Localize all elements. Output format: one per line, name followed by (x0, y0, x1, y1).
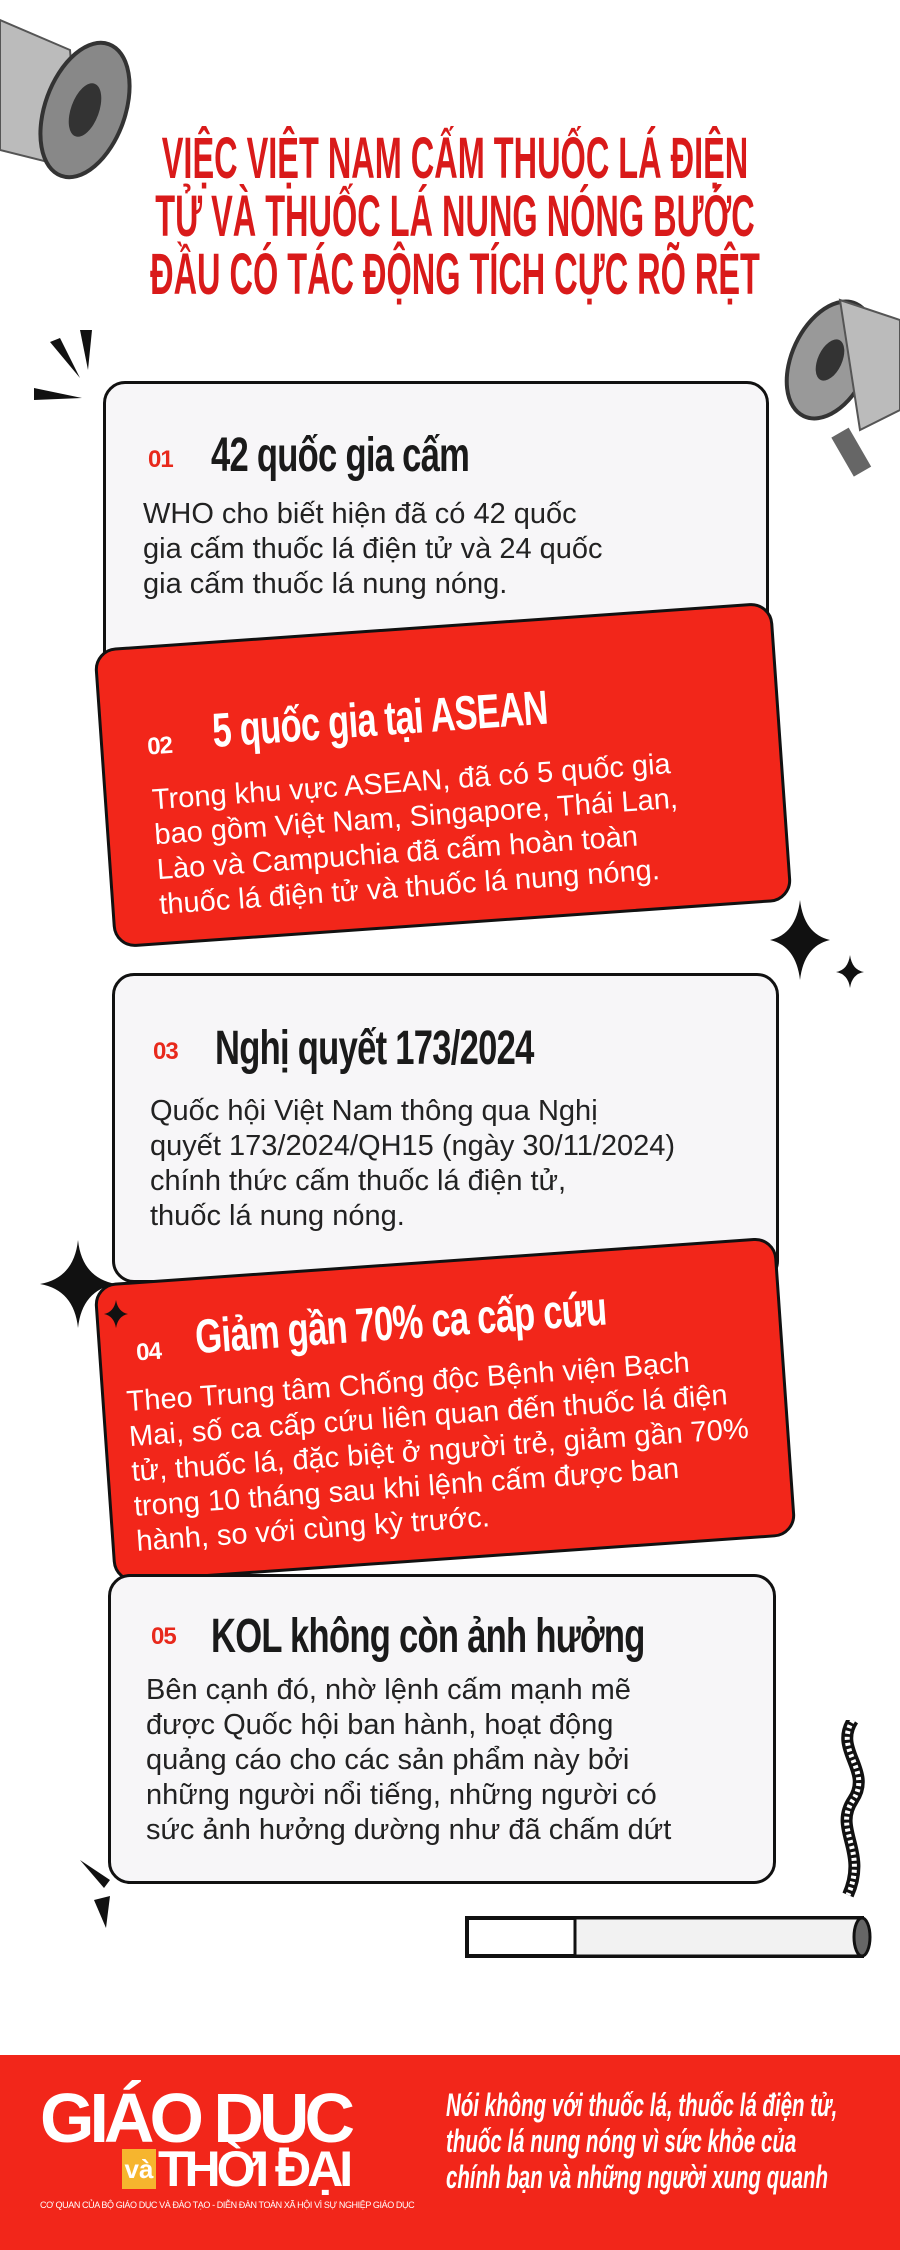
icon: megaphone top-left (0, 19, 132, 180)
icon: megaphone right (784, 298, 900, 477)
text 02: thuốc lá điện tử và thuốc lá nung nóng. (158, 854, 661, 921)
number 03: 03 (153, 1038, 178, 1065)
footer (0, 2055, 900, 2250)
heading 02: 5 quốc gia tại ASEAN (211, 682, 549, 758)
number 02: 02 (146, 732, 173, 761)
text 03: quyết 173/2024/QH15 (ngày 30/11/2024) (150, 1130, 675, 1162)
text 05 (146, 1674, 672, 1846)
text 04: hành, so với cùng kỳ trước. (135, 1501, 491, 1558)
text 05: những người nổi tiếng, những người có (146, 1779, 657, 1811)
icon: sparkle stars left (40, 1240, 128, 1328)
text 04: Mai, số ca cấp cứu liên quan đến thuốc lá điện (128, 1379, 729, 1453)
panel: card 03 (112, 973, 779, 1283)
text 03: thuốc lá nung nóng. (150, 1200, 405, 1232)
text 04: trong 10 tháng sau khi lệnh cấm được ban (133, 1453, 680, 1523)
text 01: WHO cho biết hiện đã có 42 quốc (143, 498, 577, 530)
text 02: bao gồm Việt Nam, Singapore, Thái Lan, (153, 783, 679, 851)
panel: card 02 (93, 602, 793, 948)
text 02: Trong khu vực ASEAN, đã có 5 quốc gia (151, 748, 672, 816)
logo: và (125, 2154, 153, 2184)
icon: sparkle stars right (770, 900, 864, 988)
logo (40, 2079, 414, 2210)
heading 03: Nghị quyết 173/2024 (215, 1022, 534, 1075)
text 04: Theo Trung tâm Chống độc Bệnh viện Bạch (126, 1347, 691, 1418)
slogan: chính bạn và những người xung quanh (446, 2159, 828, 2195)
text 04 (126, 1347, 750, 1558)
slogan: Nói không với thuốc lá, thuốc lá điện tử, (446, 2087, 837, 2123)
text 05: được Quốc hội ban hành, hoạt động (146, 1709, 613, 1741)
text 05: quảng cáo cho các sản phẩm này bởi (146, 1744, 629, 1776)
logo: GIÁO DỤC (40, 2079, 350, 2157)
logo: CƠ QUAN CỦA BỘ GIÁO DỤC VÀ ĐÀO TẠO - DIỄN ĐÀN TOÀN XÃ HỘI VÌ SỰ NGHIỆP GIÁO DỤC (40, 2200, 414, 2210)
text 02 (151, 748, 679, 921)
heading 05: KOL không còn ảnh hưởng (211, 1610, 645, 1663)
title: VIỆC VIỆT NAM CẤM THUỐC LÁ ĐIỆN (162, 126, 748, 191)
text 01 (143, 498, 603, 600)
text 04: tử, thuốc lá, đặc biệt ở người trẻ, giảm gần 70% (130, 1413, 750, 1488)
panel: card 04 (93, 1237, 797, 1583)
panel: card 05 (108, 1574, 776, 1884)
title (150, 126, 760, 307)
panel: card 01 (103, 381, 769, 721)
text 01: gia cấm thuốc lá điện tử và 24 quốc (143, 533, 603, 565)
text 05: Bên cạnh đó, nhờ lệnh cấm mạnh mẽ (146, 1674, 631, 1706)
text 03: chính thức cấm thuốc lá điện tử, (150, 1165, 566, 1197)
number 05: 05 (151, 1623, 176, 1650)
number 01: 01 (148, 446, 173, 473)
icon: burst lines top-left (34, 330, 92, 400)
heading 04: Giảm gần 70% ca cấp cứu (194, 1283, 608, 1364)
text 03: Quốc hội Việt Nam thông qua Nghị (150, 1095, 598, 1127)
text 01: gia cấm thuốc lá nung nóng. (143, 568, 507, 600)
icon: burst lines bottom-left (80, 1860, 110, 1928)
text 02: Lào và Campuchia đã cấm hoàn toàn (156, 821, 639, 886)
title: ĐẦU CÓ TÁC ĐỘNG TÍCH CỰC RÕ RỆT (150, 242, 760, 307)
slogan: thuốc lá nung nóng vì sức khỏe của (446, 2123, 796, 2159)
logo: THỜI ĐẠI (158, 2141, 349, 2197)
text 03 (150, 1095, 675, 1232)
text 05: sức ảnh hưởng dường như đã chấm dứt (146, 1814, 671, 1846)
heading 01: 42 quốc gia cấm (211, 429, 469, 482)
number 04: 04 (135, 1338, 162, 1366)
title: TỬ VÀ THUỐC LÁ NUNG NÓNG BƯỚC (155, 184, 755, 249)
icon: smoke squiggle (840, 1720, 865, 1898)
icon: cigarette (465, 1916, 872, 1958)
slogan (446, 2087, 837, 2195)
